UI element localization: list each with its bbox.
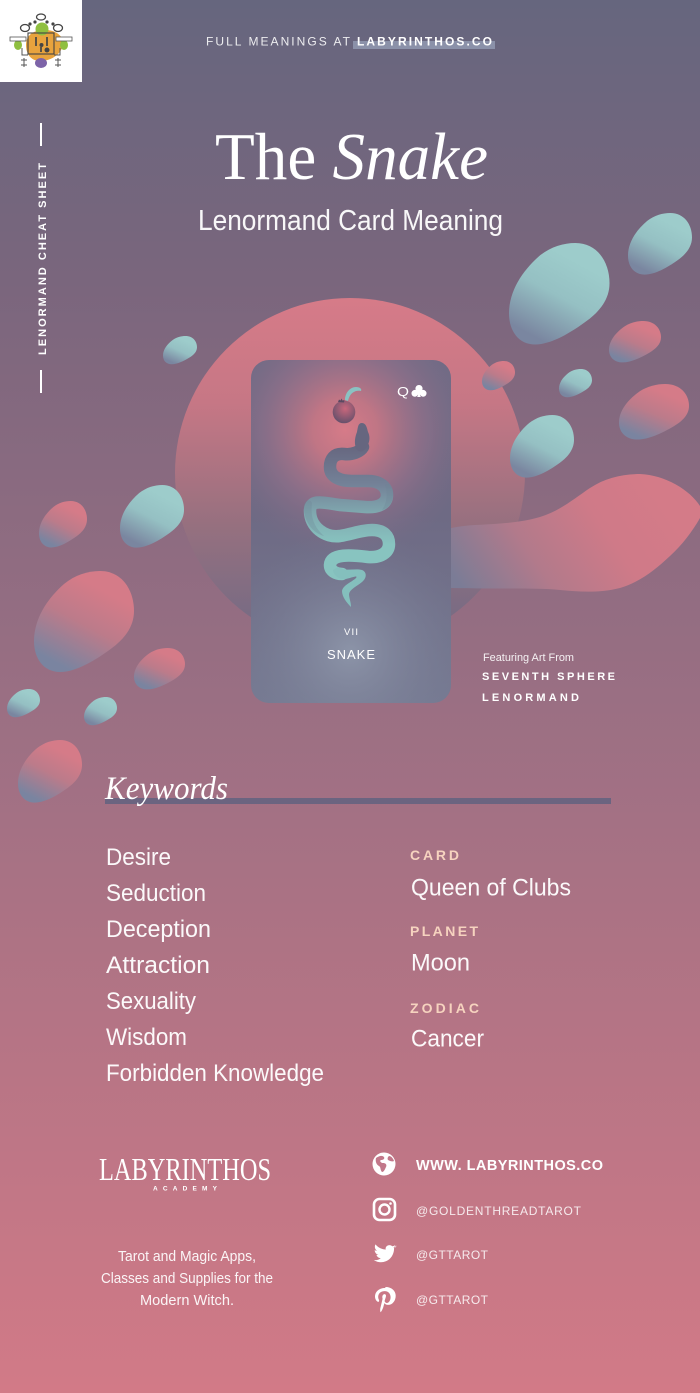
keywords list: Attraction: [106, 952, 210, 979]
header link: FULL MEANINGS AT: [206, 34, 351, 48]
art credit: SEVENTH SPHERE: [482, 671, 615, 683]
keywords list: [106, 844, 324, 1087]
keywords list: Deception: [106, 916, 211, 943]
card attributes: CARD: [410, 847, 459, 863]
side label: LENORMAND CHEAT SHEET: [37, 163, 49, 355]
icon: globe: [372, 1152, 396, 1176]
keywords list: Forbidden Knowledge: [106, 1060, 324, 1087]
floating blobs: [7, 213, 692, 803]
pinterest handle: @GTTAROT: [416, 1293, 489, 1307]
large background circle: [175, 298, 525, 648]
card index: Q: [397, 384, 409, 399]
footer description: [101, 1248, 273, 1309]
icon: apple: [333, 387, 361, 423]
art credit: LENORMAND: [482, 692, 579, 704]
header link: [206, 34, 495, 49]
keywords list: Sexuality: [106, 988, 197, 1015]
footer description: Tarot and Magic Apps,: [118, 1248, 256, 1265]
title: The Snake: [215, 120, 488, 194]
footer description: Modern Witch.: [140, 1292, 234, 1309]
icon: pinterest: [375, 1287, 396, 1312]
footer brand: [99, 1151, 271, 1192]
card attributes: ZODIAC: [410, 1000, 479, 1016]
footer brand: ACADEMY: [153, 1186, 218, 1192]
website link: WWW. LABYRINTHOS.CO: [416, 1158, 603, 1174]
keywords list: Wisdom: [106, 1024, 187, 1051]
snake illustration: [304, 423, 393, 607]
card attributes: Queen of Clubs: [411, 874, 571, 902]
subtitle: Lenormand Card Meaning: [198, 205, 503, 237]
card name: SNAKE: [327, 647, 375, 662]
tarot card: [251, 360, 451, 703]
instagram handle: @GOLDENTHREADTAROT: [416, 1204, 582, 1218]
art credit: [482, 652, 615, 704]
footer description: Classes and Supplies for the: [101, 1270, 273, 1287]
header link: LABYRINTHOS.CO: [357, 34, 492, 48]
footer brand: LABYRINTHOS: [99, 1151, 271, 1187]
keywords heading: [104, 771, 611, 807]
twitter handle: @GTTAROT: [416, 1248, 489, 1262]
icon: twitter: [374, 1244, 396, 1262]
card attributes: Cancer: [411, 1026, 484, 1052]
keywords heading: Keywords: [104, 771, 228, 807]
icon: instagram: [374, 1199, 395, 1220]
keywords list: Desire: [106, 844, 171, 871]
card index: [397, 384, 427, 399]
logo badge: [0, 0, 82, 82]
card attributes: Moon: [411, 950, 470, 976]
card attributes: PLANET: [410, 923, 478, 939]
keywords list: Seduction: [106, 880, 206, 907]
art credit: Featuring Art From: [483, 652, 574, 664]
card numeral: VII: [344, 627, 358, 638]
card attributes: [410, 847, 571, 1052]
wave shape: [430, 474, 700, 592]
